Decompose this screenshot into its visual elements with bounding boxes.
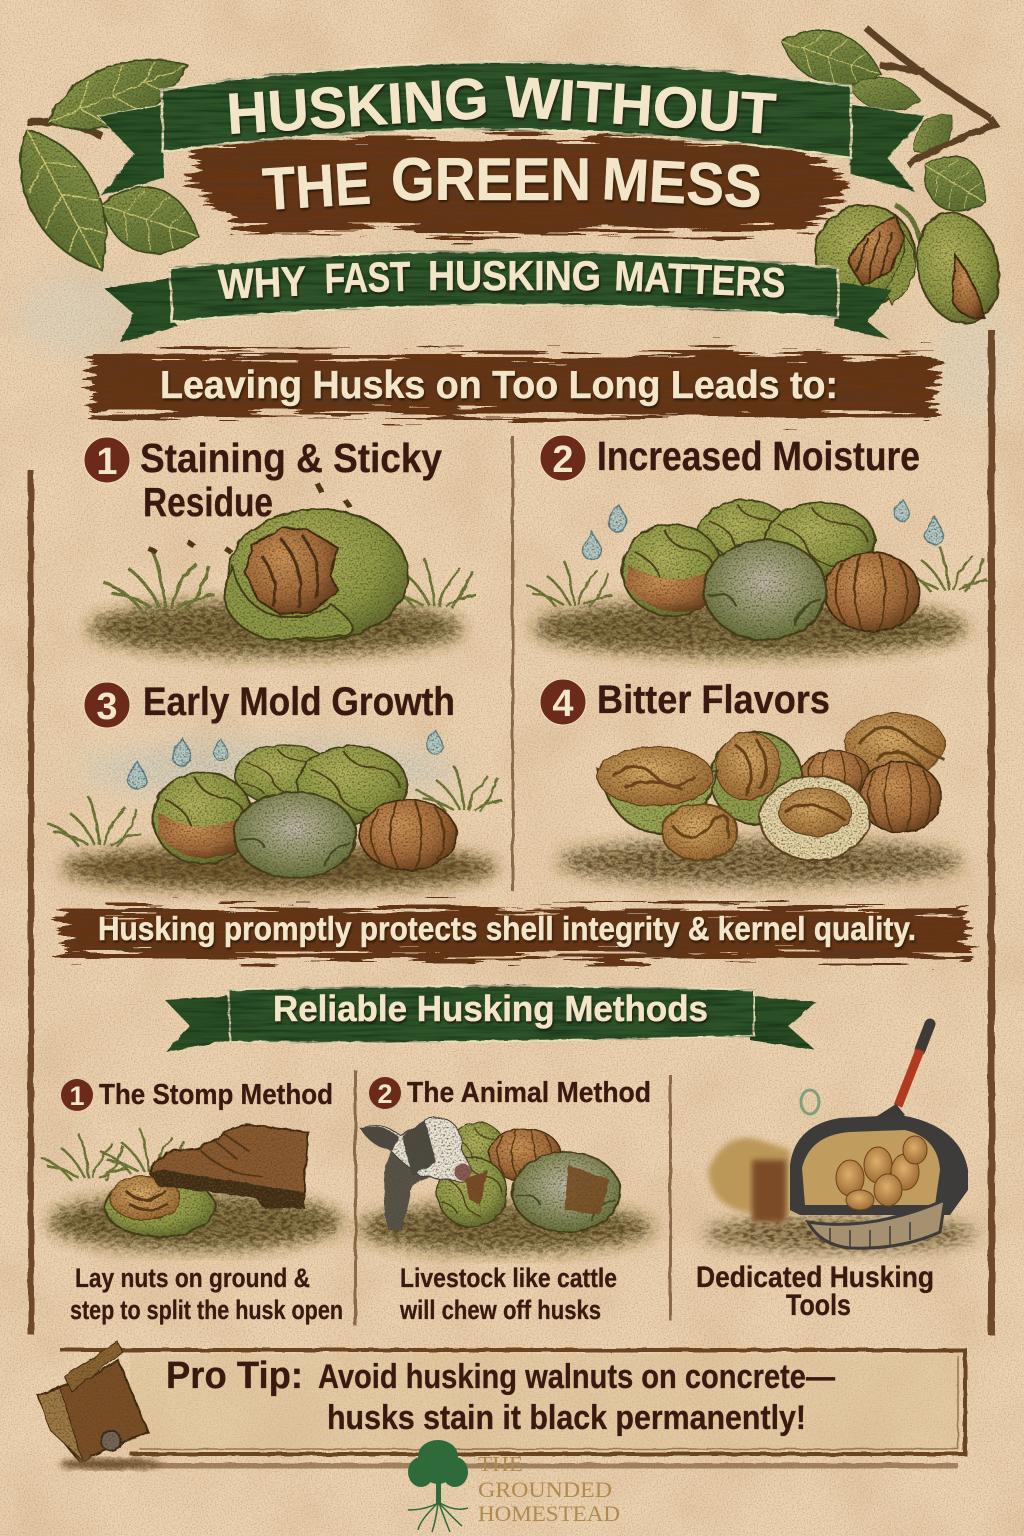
subtitle: FAST [324,253,411,302]
subtitle ribbon [104,251,892,342]
title: WITHOUT [502,64,778,147]
title: HUSKING [225,66,490,147]
title: THE [261,150,373,223]
item 1: staining and sticky residue: 1 [96,441,118,483]
subtitle: WHY [217,257,307,308]
item 4: bitter flavors: Bitter Flavors [597,678,830,722]
caption [696,1261,934,1322]
center divider [511,436,514,891]
wordmark [478,1452,620,1526]
wordmark: THE [478,1452,523,1476]
illustration: husking machine with basket [705,1024,975,1250]
caption: will chew off husks [399,1295,601,1325]
illustration: cow chewing husks [360,1118,650,1250]
panel: pro tip [38,1342,965,1470]
subtitle: MATTERS [614,252,786,306]
subtitle [217,252,786,308]
method 2: animal [360,1077,651,1325]
section banner: leaving husks: Leaving Husks on Too Long Leads to: [160,364,838,407]
caption: Livestock like cattle [400,1263,617,1293]
banner: husking promptly [62,908,967,958]
pro tip text [166,1355,835,1437]
illustration: pile of damp husks [526,499,987,654]
caption [70,1263,343,1325]
item 3: early mold growth [47,680,502,888]
pro tip text: Avoid husking walnuts on concrete— [318,1358,835,1396]
title [225,64,778,223]
icon: tree with roots [408,1440,468,1532]
icon: wooden box [38,1342,160,1470]
caption [399,1263,617,1325]
method 1: stomp [41,1079,343,1325]
method 1: stomp: 1 [69,1081,85,1111]
wordmark: GROUNDED [478,1477,612,1502]
method 2: animal: The Animal Method [407,1077,651,1109]
item 2: increased moisture: 2 [552,439,574,481]
item 3: early mold growth: Early Mold Growth [143,680,455,724]
wordmark: HOMESTEAD [478,1501,620,1526]
ribbon: reliable husking methods: Reliable Husking Methods [273,988,708,1029]
caption: Dedicated Husking [696,1261,934,1294]
illustration: burst husk on ground [90,484,476,654]
caption: Lay nuts on ground & [75,1263,310,1293]
illustration: split walnuts and kernels [560,713,960,882]
item 2: increased moisture [526,433,987,654]
foliage: right branch, leaves and green walnuts [774,18,1010,332]
title: GREEN [391,146,591,213]
caption: Tools [786,1289,851,1322]
subtitle: HUSKING [428,252,601,299]
illustration: moldy husks [47,730,502,888]
pro tip text: husks stain it black permanently! [327,1399,806,1437]
item 4: bitter flavors [540,678,960,882]
item 1: staining and sticky residue: Residue [143,479,273,525]
title: MESS [600,145,764,220]
pro tip text: Pro Tip: [166,1355,303,1397]
ribbon: reliable husking methods [165,986,816,1052]
item 1: staining and sticky residue: Staining & Sticky [140,435,442,481]
method 1: stomp: The Stomp Method [99,1079,333,1111]
title ribbon: main green band [162,62,851,158]
item 2: increased moisture: Increased Moisture [597,433,920,479]
foliage: left leaves and branch [0,39,208,286]
item 4: bitter flavors: 4 [552,683,574,725]
caption: step to split the husk open [70,1295,343,1325]
banner: husking promptly: Husking promptly protects shell integrity & kernel quality. [98,910,916,947]
illustration: boot stepping on walnut [41,1124,340,1248]
method 2: animal: 2 [377,1079,393,1109]
method dividers [354,1070,672,1326]
method 3: dedicated tools [696,1024,975,1322]
title ribbon: left and right tails [98,104,926,197]
section banner: leaving husks [90,354,935,416]
logo: grounded homestead [408,1440,620,1532]
side border lines [28,330,995,1335]
item 3: early mold growth: 3 [96,686,118,728]
brown brush stroke behind title line 2 [186,138,850,232]
item 1: staining and sticky residue [84,435,476,654]
